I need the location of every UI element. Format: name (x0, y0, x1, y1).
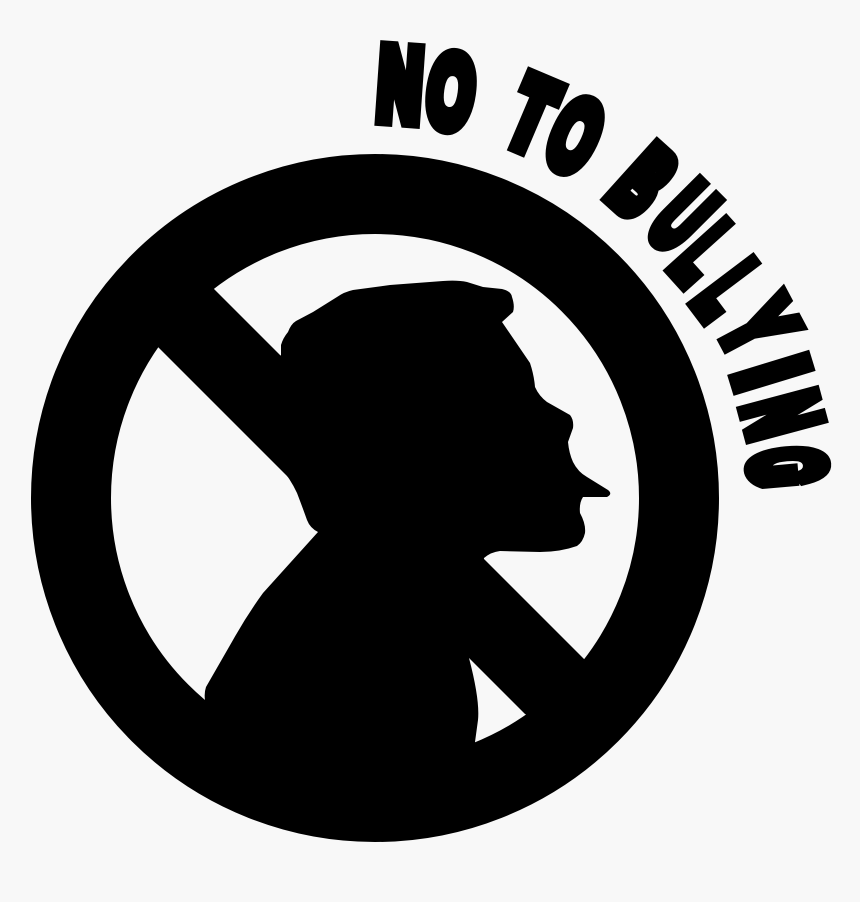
word: BULLYING: B (591, 128, 695, 237)
heading: NO TO BULLYING arched text (374, 28, 845, 490)
word: TO: T (493, 57, 571, 174)
silhouette: bullying figure with long nose (205, 281, 610, 790)
prohibition sign (71, 194, 679, 802)
word: NO: O (421, 34, 481, 151)
word: BULLYING: L (653, 206, 754, 301)
outer ring (71, 194, 679, 802)
word: BULLYING: G (730, 443, 845, 490)
word: BULLYING: U (631, 164, 736, 269)
word: BULLYING (591, 128, 845, 490)
word: BULLYING: I (715, 348, 827, 399)
word: BULLYING: L (675, 246, 780, 335)
word: TO: O (532, 77, 618, 196)
diagonal prohibition bar (130, 265, 600, 745)
word: BULLYING: N (724, 382, 841, 447)
word: BULLYING: Y (700, 285, 815, 370)
word: NO: N (374, 28, 425, 142)
word: TO (493, 57, 618, 196)
word: NO (374, 28, 481, 151)
